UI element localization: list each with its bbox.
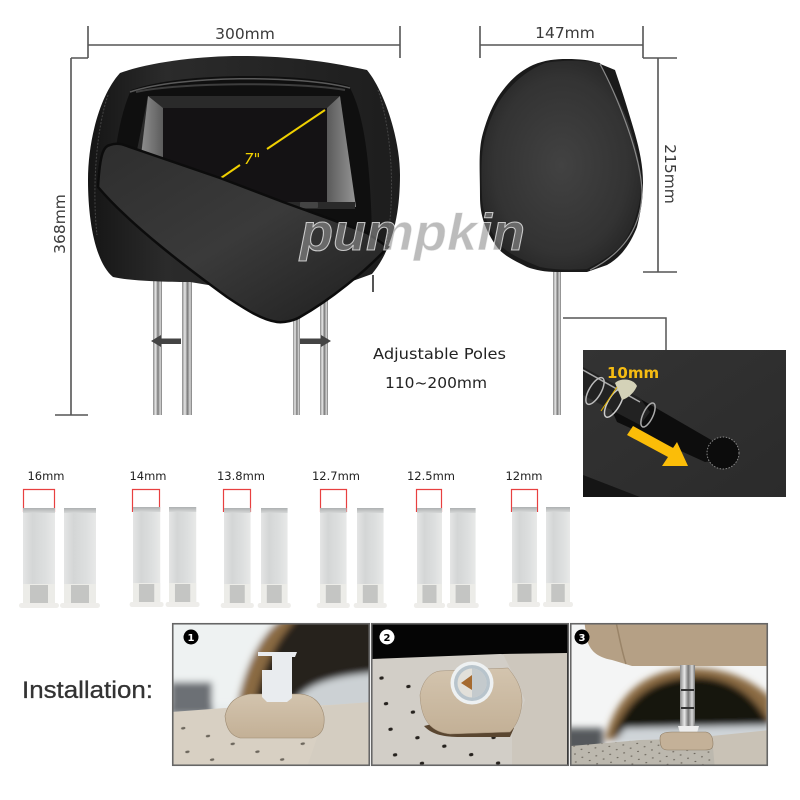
screen diagonal 7 inch bbox=[221, 110, 325, 178]
photo: front of headrest monitor bbox=[88, 56, 400, 322]
dimension: 215mm height: 215mm bbox=[661, 144, 679, 204]
dimension: 368mm height: 368mm bbox=[51, 194, 69, 254]
label: adjustable poles bbox=[373, 345, 506, 392]
panel: installation step 2 bbox=[371, 623, 570, 770]
sleeve set 12.7mm: 12.7mm bbox=[312, 469, 360, 483]
label: adjustable poles: 110~200mm bbox=[385, 374, 487, 392]
photo: side of headrest bbox=[480, 59, 643, 272]
slot bbox=[612, 400, 712, 462]
yellow 10mm measure bbox=[601, 364, 659, 411]
dimension: 147mm depth: 147mm bbox=[535, 24, 595, 42]
watermark logo: pumpkin bbox=[298, 204, 525, 262]
arrow: poles left bbox=[151, 335, 181, 347]
badge 3: 3 bbox=[579, 633, 586, 644]
sleeve set 12.7mm bbox=[312, 469, 387, 608]
yellow direction arrow bbox=[627, 426, 688, 466]
bezel frame bbox=[112, 76, 372, 240]
inset: 10mm pole slot photo bbox=[582, 350, 786, 497]
badge 2: 2 bbox=[384, 633, 391, 644]
badge 1 bbox=[184, 630, 198, 644]
leader line from pole to inset bbox=[563, 318, 666, 397]
sleeve set 16mm: 16mm bbox=[27, 469, 65, 483]
sleeve set 12mm: 12mm bbox=[505, 469, 543, 483]
panel: installation step 1 bbox=[172, 622, 370, 766]
badge 3 bbox=[574, 630, 590, 644]
sleeve set 12.5mm: 12.5mm bbox=[407, 469, 455, 483]
sleeve set 14mm: 14mm bbox=[129, 469, 167, 483]
zipper cover flap bbox=[98, 144, 388, 322]
screen diagonal 7 inch: 7" bbox=[244, 150, 260, 168]
sleeve set 16mm bbox=[19, 469, 100, 608]
arrow: poles right bbox=[300, 335, 331, 347]
screen bbox=[163, 108, 327, 202]
pole with rings bbox=[583, 367, 650, 425]
poles: front view bbox=[153, 275, 328, 415]
heading: installation: Installation: bbox=[22, 677, 153, 704]
sleeve set 12mm bbox=[505, 469, 573, 607]
dimension: 147mm depth bbox=[480, 24, 643, 58]
zipper pull bbox=[372, 275, 374, 292]
dimension: 300mm width bbox=[88, 25, 400, 58]
badge 1: 1 bbox=[188, 633, 195, 644]
sleeve set 12.5mm bbox=[407, 469, 479, 608]
sleeve set 13.8mm bbox=[217, 469, 291, 608]
sleeve set 13.8mm: 13.8mm bbox=[217, 469, 265, 483]
pole: side view bbox=[553, 268, 561, 415]
headrest body bbox=[88, 56, 400, 300]
dimension: 215mm height bbox=[643, 58, 679, 272]
dimension: 300mm width: 300mm bbox=[215, 25, 275, 43]
label: adjustable poles: Adjustable Poles bbox=[373, 345, 506, 363]
collar disc bbox=[450, 662, 494, 704]
badge 2 bbox=[380, 630, 394, 644]
panel: installation step 3 bbox=[565, 620, 770, 770]
sleeve set 14mm bbox=[129, 469, 200, 607]
dimension: 368mm height bbox=[51, 58, 88, 415]
yellow 10mm measure: 10mm bbox=[607, 364, 659, 382]
